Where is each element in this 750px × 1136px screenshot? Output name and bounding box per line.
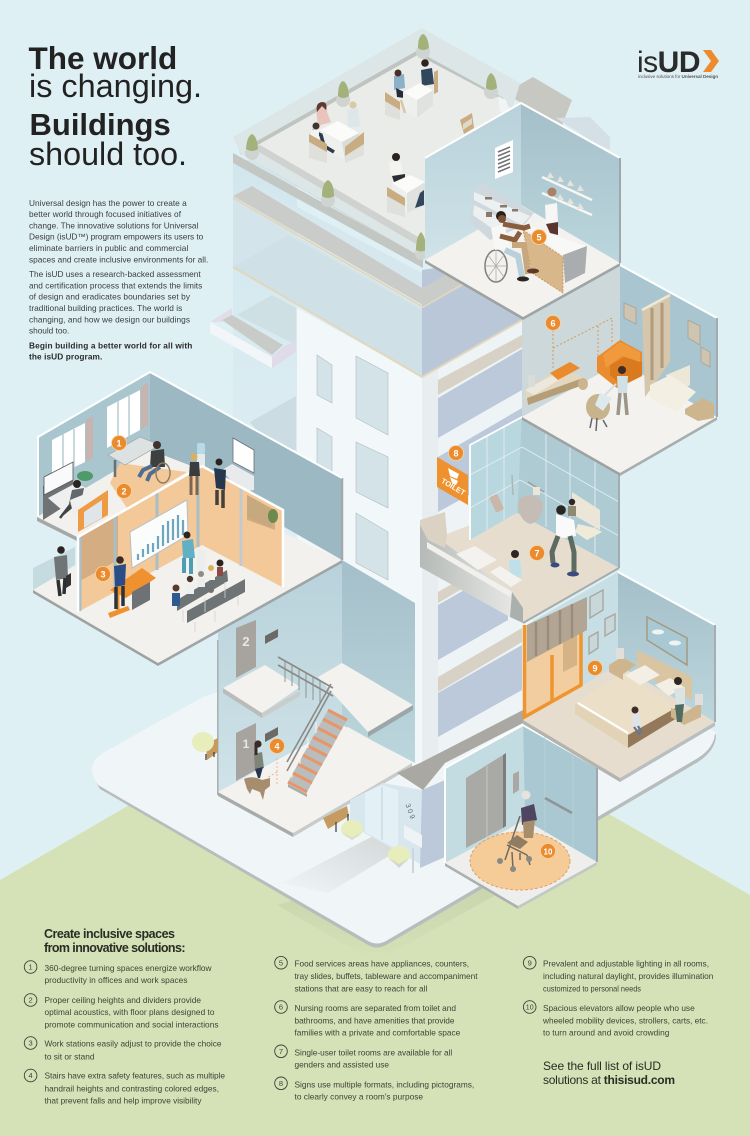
server woman [545,188,558,235]
workstation left [43,462,94,520]
solution 6: families with a private and comfortable space [294,1028,461,1038]
solution 10: Spacious elevators allow people who use [543,1003,695,1013]
solution 7 [275,1045,452,1069]
back roof block [505,77,610,150]
solution 5: stations that are easy to reach for all [294,984,427,994]
solution 1: 1 [29,963,33,972]
stair handrails [278,657,333,771]
solutions column two [275,956,478,1101]
solution 10: 10 [526,1005,534,1012]
solution 5: tray slides, buffets, tableware and accompaniment [294,971,478,981]
main title: should too. [29,136,187,172]
tower right windows [438,335,522,737]
green ground [0,671,750,1136]
solution 7: 7 [279,1047,283,1056]
food display case [470,183,534,240]
man at desk [114,556,126,609]
solution 8: 8 [279,1079,283,1088]
back wall display [233,438,254,473]
solution 7: Single-user toilet rooms are available for all [294,1047,452,1057]
badge 5 [532,230,546,244]
solution 9: Prevalent and adjustable lighting in all rooms, [543,958,709,968]
isUD logo: inclusive solutions for Universal Design [638,74,718,79]
solution 5 [275,956,478,994]
solution 9: 9 [528,958,532,967]
website call to action: solutions at thisisud.com [543,1073,675,1087]
badge 3: 3 [100,570,106,580]
intro text: traditional building practices. The world is [29,303,182,313]
badge 6: 6 [550,318,556,328]
badge 1 [112,436,126,450]
badge 10: 10 [544,848,553,856]
solution 8: to clearly convey a room's purpose [294,1091,423,1101]
bedroom wall painting [647,617,687,665]
solution 10: to turn around and avoid crowding [543,1028,670,1038]
intro text: Universal design has the power to create a [29,198,187,208]
solution 8: Signs use multiple formats, including pictograms, [294,1079,474,1089]
intro text [29,198,208,362]
door 2 [236,620,256,678]
tower white facades [297,308,522,790]
intro text: should too. [29,326,69,336]
balcony left [210,308,296,368]
platform shadow [277,850,505,962]
badge 7 [530,546,544,560]
upper floors facade [233,183,522,377]
man in wheelchair [485,211,539,282]
partition walls [78,466,283,612]
intro text: Design (isUD™) program empowers its users to [29,232,204,242]
badge 7: 7 [534,548,540,558]
solution 9: including natural daylight, provides illumination [543,971,714,981]
solution 2 [24,994,218,1030]
roof table group left [309,101,364,163]
solution 4: Stairs have extra safety features, such as multiple [44,1071,225,1081]
bedroom [523,572,715,782]
intro text: and certification process that extends the limits [29,280,202,290]
solution 9: customized to personal needs [543,984,641,994]
solution 10 [523,1001,708,1038]
solution 1 [24,961,212,985]
solution 3 [24,1037,222,1061]
nursing room [522,265,717,476]
rear floor [37,450,202,541]
solution 8 [275,1077,474,1101]
solution 6: Nursing rooms are separated from toilet and [294,1003,456,1013]
solutions column three [523,956,714,1038]
wall frames [624,303,710,367]
main title [28,40,202,172]
door 2: 2 [242,634,250,649]
intro text: change. The innovative solutions for Universal [29,220,198,230]
bedside tables [609,648,703,725]
solutions heading: Create inclusive spaces [44,927,175,941]
solution 2: optimal acoustics, with floor plans designed to [44,1007,215,1017]
solution 3: to sit or stand [44,1051,95,1061]
solution 6: 6 [279,1003,283,1012]
curtain [642,295,670,397]
office windows left [52,416,93,478]
cream armchair [650,365,696,412]
door 1: 1 [243,737,250,751]
solution 2: Proper ceiling heights and dividers provide [44,995,201,1005]
menu board [495,140,513,179]
orange presentation desk [108,568,156,618]
workstation partition orange [78,490,108,532]
entry shrubs and bench [323,806,410,868]
door 1 [236,723,256,781]
badge 3 [96,566,110,582]
tower left windows [317,355,388,580]
solution 3: Work stations easily adjust to provide the choice [44,1039,222,1049]
stairs [288,710,347,797]
solutions column one [24,961,225,1106]
website call to action: See the full list of isUD [543,1059,661,1073]
storage cabinet and plant [247,495,278,528]
solution 5: Food services areas have appliances, counters, [294,958,469,968]
badge 4 [270,738,284,754]
woman with stroller [586,366,628,431]
elevator doors [466,753,506,848]
water cooler [197,443,205,470]
entrance: 3 0 9 [403,803,415,820]
solution 1: 360-degree turning spaces energize workflow [44,963,212,973]
isUD logo: isUD [637,46,700,79]
entrance [350,710,523,873]
badge 6 [546,316,560,330]
stair room [217,560,415,837]
orange armchair [597,340,642,388]
audience seating [172,560,245,632]
intro text: better world through focused initiatives of [29,209,182,219]
woman with walker [497,790,537,872]
upper landing right [318,663,413,737]
bench and shrub left [192,732,218,760]
building ground platform [92,600,716,948]
child on bed [632,706,642,735]
low sink wall [420,512,523,623]
presenter [182,532,205,575]
intro text: changing, and how we design our buildings [29,314,190,324]
bed [575,650,692,748]
ghost upper building [233,160,297,550]
standing desk [108,437,160,477]
main title: is changing. [29,68,202,104]
intro text: the isUD program. [29,352,102,362]
dotted callout [267,758,277,785]
main title: The world [28,40,177,76]
man holding child [550,499,579,576]
roof table group lower [387,153,425,217]
solution 9 [523,956,714,994]
solution 10: wheeled mobility devices, strollers, carts, etc. [542,1015,708,1025]
main title: Buildings [30,107,171,142]
toilet door sign: TOILET [440,476,467,498]
walking man [54,546,71,596]
badge 8 [448,446,464,460]
toilet door sign [437,457,468,505]
badge 8: 8 [453,448,459,458]
badge 1: 1 [116,438,122,448]
wall shelves [542,177,592,215]
counter [523,227,587,293]
main stair floor [218,727,412,837]
woman with guide dog [244,740,270,800]
solution 7: genders and assisted use [294,1059,389,1069]
solution 1: productivity in offices and work spaces [44,975,188,985]
solutions heading: from innovative solutions: [44,941,186,955]
roof terrace [233,28,520,268]
lone roof chair [460,113,474,134]
bedroom window [523,597,587,720]
intro text: spaces and create inclusive environments for all. [29,254,208,264]
food service room [425,103,620,320]
solution 4: handrail heights and contrasting colored edges, [44,1083,219,1093]
solution 4: 4 [29,1071,33,1080]
nightstand [685,398,714,421]
solution 5: 5 [279,958,283,967]
fold-down changing table [572,492,602,540]
badge 2 [116,484,132,498]
bedroom wall frames [589,590,615,654]
meeting screen and chart [130,500,188,568]
wheelchair user [139,441,170,483]
roof planters [245,34,498,260]
badge 4: 4 [274,742,280,752]
solution 6 [275,1001,461,1038]
door plaques [265,629,278,742]
solution 6: bathrooms, and have amenities that provide [294,1015,455,1025]
website call to action [543,1059,675,1087]
badge 5: 5 [536,232,542,242]
dotted frame [553,318,612,370]
intro text: The isUD uses a research-backed assessment [29,269,201,279]
intro text: Begin building a better world for all with [29,340,192,350]
turning circle [470,832,570,890]
upper landing left [223,665,300,718]
people behind partition [189,454,226,508]
solution 3: 3 [29,1039,33,1048]
print table [222,464,254,492]
solutions heading [44,927,186,955]
grab rail [545,798,572,813]
badge 2: 2 [121,486,127,496]
solution 2: promote communication and social interactions [44,1020,218,1030]
changing table [525,362,588,405]
solution 2: 2 [29,996,33,1005]
intro text: of design and eradicates boundaries set by [29,292,191,302]
toilet fixture [489,475,544,524]
badge 9: 9 [592,664,598,674]
roof table group top [385,59,438,120]
office windows right [107,383,148,448]
call panel [513,771,519,794]
solution 4: that prevent falls and help improve visibility [44,1096,202,1106]
badge 9 [588,660,602,676]
child by sink [509,550,522,577]
woman by bed [674,677,685,722]
elevator room [445,725,597,909]
toilet room [420,417,619,623]
office suite [33,372,342,666]
badge 10 [540,844,556,858]
solution 4 [24,1069,225,1106]
intro text: eliminate barriers in public and commercial [29,243,188,253]
